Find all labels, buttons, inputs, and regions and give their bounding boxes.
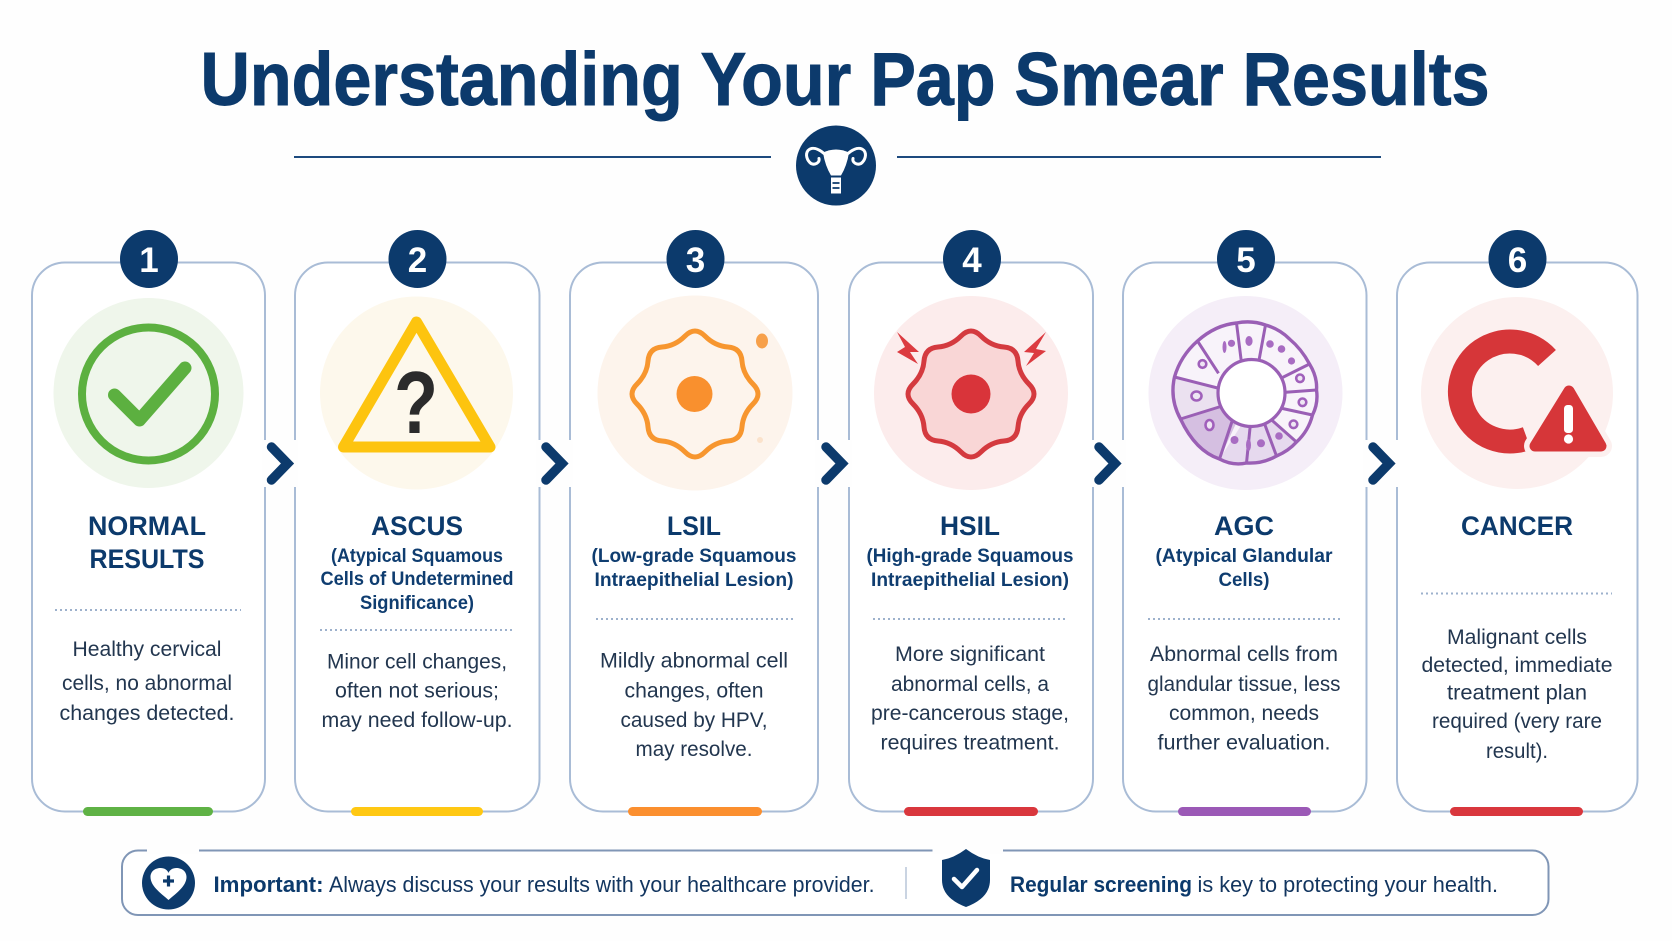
screening note [1010, 872, 1498, 897]
heading: Cells) [1218, 569, 1270, 591]
description [60, 638, 234, 725]
panel: ascus [295, 230, 540, 816]
status bar [83, 807, 213, 816]
heading [320, 511, 514, 614]
heading: (Atypical Squamous [331, 545, 503, 567]
description [600, 650, 788, 761]
panel: lsil [570, 230, 818, 816]
icon: mildly abnormal cell [598, 296, 792, 490]
description: required (very rare [1432, 710, 1602, 733]
status bar [904, 807, 1038, 816]
footer callout [122, 846, 1548, 915]
description [1148, 643, 1340, 754]
heading: Intraepithelial Lesion) [594, 569, 794, 591]
number badge 5: 5 [1236, 241, 1256, 280]
heading: Intraepithelial Lesion) [871, 569, 1069, 591]
heading [1156, 511, 1333, 591]
icon: letter C with warning triangle [1421, 297, 1613, 489]
number badge 6: 6 [1508, 241, 1527, 280]
title: Understanding Your Pap Smear Results [200, 37, 1490, 121]
description: may resolve. [636, 738, 752, 761]
description: result). [1486, 740, 1548, 763]
description: More significant [895, 643, 1045, 666]
icon: shield with check [942, 849, 990, 907]
heading: (High-grade Squamous [866, 545, 1074, 567]
description: glandular tissue, less [1148, 673, 1340, 696]
screening note: is key to protecting your health. [1198, 872, 1498, 897]
arrow 2 to 3 [536, 440, 573, 487]
status bar [1450, 807, 1583, 816]
number badge 4: 4 [962, 241, 982, 280]
description: Healthy cervical [72, 638, 222, 661]
heading: RESULTS [90, 544, 204, 574]
heading [88, 511, 206, 574]
heading: NORMAL [88, 511, 206, 541]
important note: Always discuss your results with your healthcare provider. [329, 872, 874, 897]
icon: warning triangle with question mark [320, 296, 513, 490]
status bar [351, 807, 483, 816]
status bar [1178, 807, 1311, 816]
header divider with emblem [294, 126, 1381, 206]
number badge 4 [943, 230, 1001, 288]
description [322, 650, 512, 732]
description [1422, 626, 1612, 763]
screening note: Regular screening [1010, 872, 1192, 897]
icon: uterus emblem [796, 126, 876, 206]
number badge 2: 2 [408, 241, 427, 280]
description: abnormal cells, a [891, 673, 1049, 696]
description: may need follow-up. [322, 709, 512, 732]
icon: warning triangle with question mark: ? [394, 353, 438, 452]
description: Minor cell changes, [327, 650, 507, 674]
description: further evaluation. [1158, 732, 1330, 754]
status bar [628, 807, 762, 816]
heading: AGC [1214, 511, 1274, 541]
heading: (Low-grade Squamous [592, 545, 797, 567]
description: Mildly abnormal cell [600, 650, 788, 672]
number badge 1 [120, 230, 178, 288]
number badge 3: 3 [686, 241, 705, 280]
heading: (Atypical Glandular [1156, 545, 1333, 567]
panel: agc [1123, 230, 1366, 816]
description: changes detected. [60, 702, 234, 725]
heading: LSIL [667, 511, 721, 541]
arrow 5 to 6 [1363, 440, 1400, 487]
description: treatment plan [1447, 682, 1587, 704]
description: Abnormal cells from [1150, 643, 1338, 666]
description: changes, often [624, 680, 764, 702]
heading: Cells of Undetermined [320, 568, 514, 590]
description: pre-cancerous stage, [871, 702, 1069, 725]
description: detected, immediate [1422, 654, 1612, 677]
description [871, 643, 1069, 754]
number badge 1: 1 [139, 241, 159, 280]
panel: hsil [849, 230, 1093, 816]
heading: HSIL [940, 511, 1000, 541]
heading [866, 511, 1074, 591]
heading: CANCER [1461, 511, 1573, 541]
arrow 4 to 5 [1090, 440, 1126, 487]
icon: glandular cell ring [1148, 296, 1342, 490]
description: cells, no abnormal [62, 672, 232, 695]
important note: Important: [214, 872, 324, 897]
description: requires treatment. [880, 732, 1060, 754]
description: Malignant cells [1447, 626, 1587, 649]
icon: green check [54, 298, 244, 488]
number badge 6 [1488, 230, 1546, 288]
description: common, needs [1169, 702, 1319, 725]
panel: normal results [32, 230, 265, 816]
arrow 1 to 2 [262, 440, 298, 487]
icon: heart with cross [142, 856, 195, 910]
number badge 3 [666, 230, 724, 288]
number badge 5 [1217, 230, 1275, 288]
number badge 2 [388, 230, 446, 288]
heading: Significance) [360, 592, 474, 614]
icon: abnormal cell with lightning [874, 296, 1068, 490]
panel: cancer [1397, 230, 1638, 816]
description: often not serious; [335, 680, 499, 702]
heading: ASCUS [371, 511, 463, 541]
description: caused by HPV, [620, 709, 768, 732]
heading [592, 511, 797, 591]
arrow 3 to 4 [815, 440, 852, 487]
